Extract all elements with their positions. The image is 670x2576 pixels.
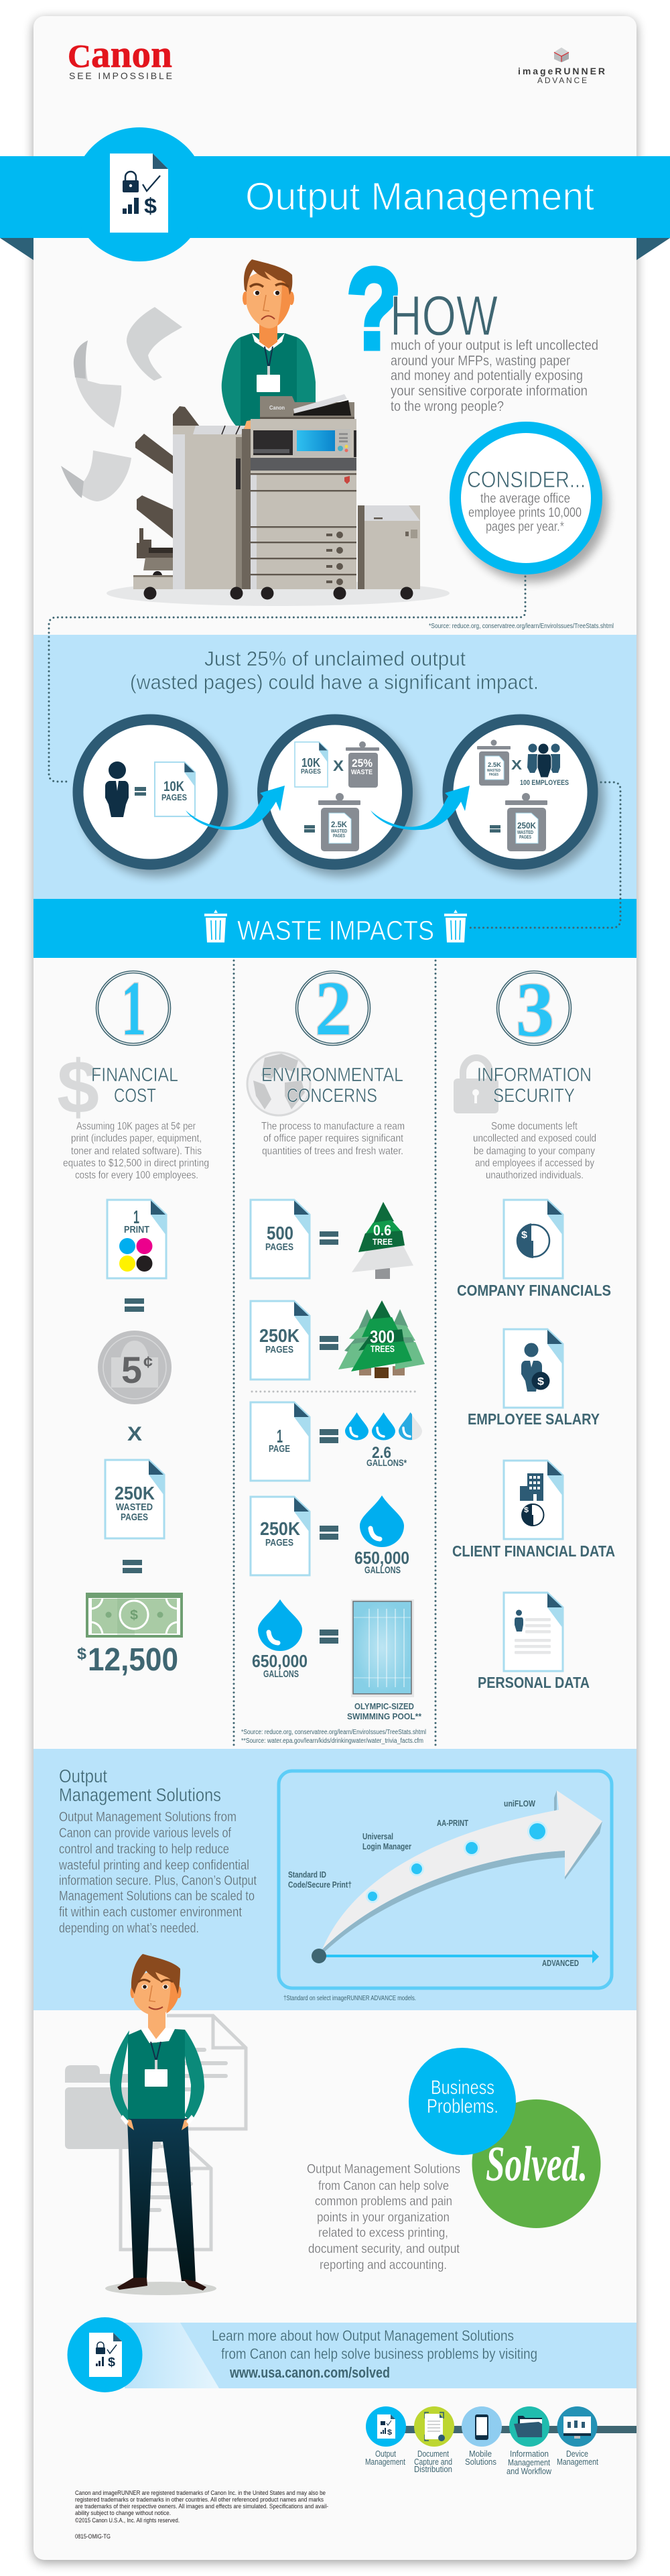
- head: [259, 315, 277, 349]
- heading: SECURITY: [493, 1085, 575, 1107]
- document: 250K wasted pages: 250K: [115, 1483, 155, 1504]
- circles: business problems solved: [409, 2048, 600, 2228]
- pool caption: SWIMMING POOL**: [347, 1711, 422, 1721]
- icon: trash left: [204, 910, 227, 942]
- icon: employees group: [527, 744, 560, 778]
- value: 2.6 gallons: 2.6: [372, 1444, 391, 1462]
- number 2 badge: 2: [315, 966, 352, 1052]
- circle: 100 employees: 2.5K: [488, 761, 502, 768]
- circle: wasted pages: PAGES: [301, 768, 321, 776]
- wheels: [143, 587, 413, 599]
- value: 650,000 gallons pool: 650,000: [252, 1651, 308, 1671]
- icon: trash right: [444, 910, 467, 942]
- circle: wasted pages: [257, 715, 419, 877]
- icon labels: Output: [375, 2449, 396, 2459]
- solutions text block: [58, 1810, 257, 1936]
- icon labels: Device: [566, 2449, 588, 2459]
- body text: [261, 1121, 405, 1157]
- how text block: to the wrong people?: [391, 399, 504, 414]
- body text: [473, 1121, 596, 1181]
- icon: output management: [366, 2406, 406, 2447]
- document: 250K pages water: 250K: [260, 1518, 300, 1539]
- solved text block: points in your organization: [317, 2211, 450, 2225]
- sources: **Source: water.epa.gov/learn/kids/drinkingwater/water_trivia_facts.cfm: [241, 1737, 423, 1745]
- document: 250K wasted pages: PAGES: [121, 1512, 148, 1523]
- body text: [63, 1121, 209, 1181]
- arrow: second step: [371, 786, 470, 830]
- chart labels: Login Manager: [362, 1841, 411, 1851]
- body text: costs for every 100 employees.: [75, 1170, 198, 1181]
- circle: wasted pages: WASTED: [331, 829, 347, 834]
- background documents and folder: [65, 2016, 246, 2250]
- how text block: much of your output is left uncollected: [391, 338, 598, 353]
- legal text: 0815-OMIG-TG: [75, 2533, 111, 2540]
- circles: business problems solved: Solved.: [486, 2137, 588, 2192]
- label: CLIENT FINANCIAL DATA: [452, 1542, 615, 1560]
- icon labels: Management: [557, 2457, 598, 2467]
- solved text block: document security, and output: [308, 2242, 460, 2256]
- circles: business problems solved: Problems.: [427, 2095, 498, 2118]
- consider callout: the average office: [480, 491, 570, 506]
- document: company financials: $: [521, 1229, 528, 1241]
- chart labels: uniFLOW: [504, 1798, 536, 1808]
- chart labels: Universal: [362, 1831, 393, 1841]
- icon labels: Mobile: [469, 2449, 492, 2459]
- man standing: [105, 1954, 216, 2295]
- label: COMPANY FINANCIALS: [457, 1282, 611, 1299]
- connector dotted line: [49, 576, 525, 782]
- document: employee salary: $: [537, 1376, 544, 1388]
- value: 650,000 gallons pool: [252, 1651, 308, 1680]
- column 3: information security: [452, 967, 615, 1691]
- heading: COST: [114, 1085, 156, 1107]
- document: 1 page: PAGE: [269, 1443, 290, 1455]
- pool caption: OLYMPIC-SIZED: [354, 1701, 414, 1711]
- solved text block: [307, 2162, 460, 2272]
- body text: be damaging to your company: [474, 1146, 595, 1157]
- water drops: 2.6 gallons: [345, 1412, 422, 1440]
- circle: wasted pages: PAGES: [333, 834, 345, 839]
- imageRUNNER ADVANCE logo: imageRUNNER: [518, 66, 605, 76]
- heading: FINANCIAL: [91, 1064, 178, 1086]
- document: 500 pages: PAGES: [265, 1241, 293, 1253]
- lanyard and badge: [265, 347, 273, 369]
- circle: 100 employees: WASTED: [517, 831, 533, 835]
- heading: CONCERNS: [287, 1085, 377, 1107]
- tree: 0.6 tree: [352, 1202, 413, 1279]
- circle: wasted pages: 10K: [302, 756, 320, 770]
- solutions bar: [402, 2426, 636, 2433]
- sweater and arms: [222, 337, 249, 426]
- pool caption: [347, 1701, 422, 1721]
- icon: dollar watermark: $: [57, 1045, 99, 1129]
- sources: [241, 1729, 426, 1745]
- equals: [320, 1630, 338, 1644]
- icon: bin 25 percent: [346, 741, 379, 788]
- equals: [320, 1526, 338, 1540]
- impact heading: Just 25% of unclaimed output: [204, 647, 466, 670]
- Canon logo: SEE IMPOSSIBLE: [69, 70, 172, 81]
- title: Output Management: [245, 175, 594, 219]
- icon: globe watermark: [247, 1052, 310, 1115]
- trees: 300 trees: TREES: [371, 1343, 395, 1354]
- how text block: [391, 338, 598, 414]
- column 2: environmental concerns: [241, 966, 426, 1745]
- label: EMPLOYEE SALARY: [468, 1410, 600, 1428]
- icon labels: [365, 2449, 598, 2476]
- neck: [148, 2004, 165, 2043]
- heading: ENVIRONMENTAL: [261, 1064, 403, 1086]
- solutions text block: wasteful printing and keep confidential: [58, 1858, 249, 1873]
- value: 650,000 gallons: 650,000: [354, 1548, 409, 1568]
- big water drop: [360, 1495, 404, 1547]
- document: 1 page: 1: [277, 1426, 283, 1447]
- consider callout: pages per year.*: [486, 519, 564, 534]
- finisher: [173, 406, 200, 434]
- ribbon banner: [0, 127, 670, 261]
- heading: [261, 1064, 403, 1107]
- value: 650,000 gallons: GALLONS: [364, 1565, 401, 1576]
- circle: wasted pages: X: [333, 757, 344, 774]
- amount: 12,500: [88, 1642, 178, 1678]
- value: 2.6 gallons: GALLONS*: [366, 1457, 407, 1468]
- solutions text block: depending on what’s needed.: [59, 1921, 199, 1936]
- equals: [320, 1231, 338, 1245]
- body text: and employees if accessed by: [475, 1158, 594, 1169]
- document: employee salary: [504, 1329, 563, 1408]
- solutions text block: control and tracking to help reduce: [59, 1842, 229, 1857]
- source note: *Source: reduce.org, conservatree.org/learn/EnviroIssues/TreeStats.shtml: [429, 623, 614, 630]
- circle: 100 employees: WASTED: [487, 769, 500, 773]
- solved text block: reporting and accounting.: [320, 2258, 447, 2272]
- icon: lock watermark: [454, 1058, 498, 1113]
- icon: device management: [557, 2406, 598, 2447]
- dollar bill: [86, 1593, 183, 1638]
- icon: output management badge: [67, 2317, 142, 2392]
- legal text: ability subject to change without notice.: [75, 2510, 171, 2517]
- man with printer: [107, 259, 450, 606]
- circles: business problems solved: Business: [431, 2077, 494, 2099]
- question mark: ?: [346, 245, 401, 373]
- value: 2.6 gallons: [366, 1444, 407, 1468]
- multiply sign: X: [127, 1423, 142, 1445]
- document: 1 print: PRINT: [124, 1224, 149, 1235]
- call to action text: from Canon can help solve business problems by visiting: [221, 2345, 537, 2362]
- legal text: ©2015 Canon U.S.A., Inc. All rights reserved.: [75, 2517, 180, 2524]
- man with printer: Canon: [269, 405, 285, 411]
- solved text block: Output Management Solutions: [307, 2162, 460, 2176]
- value: 650,000 gallons pool: GALLONS: [263, 1668, 299, 1680]
- heading: [91, 1064, 178, 1107]
- body text: equates to $12,500 in direct printing: [63, 1158, 209, 1169]
- heading: INFORMATION: [477, 1064, 592, 1086]
- legal text: Canon and imageRUNNER are registered trademarks of Canon Inc. in the United States and may also be: [75, 2490, 326, 2497]
- head: [130, 1986, 135, 1998]
- solutions heading: Management Solutions: [59, 1784, 221, 1805]
- solutions heading: [59, 1766, 221, 1805]
- arms: [110, 2030, 131, 2122]
- paper deck: [358, 505, 420, 589]
- body text: The process to manufacture a ream: [261, 1121, 405, 1132]
- milestone dots: [366, 1821, 547, 1903]
- icon labels: Distribution: [414, 2464, 452, 2474]
- band: 25 percent impact: [34, 635, 636, 899]
- legs: [127, 2118, 196, 2281]
- solved text block: from Canon can help solve: [318, 2179, 449, 2193]
- body text: uncollected and exposed could: [473, 1133, 596, 1144]
- lanyard and badge: [151, 2042, 161, 2061]
- sources: *Source: reduce.org, conservatree.org/learn/EnviroIssues/TreeStats.shtml: [241, 1729, 426, 1736]
- tree: 0.6 tree: 0.6: [373, 1222, 391, 1239]
- coin: 5 cents: [98, 1331, 172, 1404]
- shadow: [105, 2282, 216, 2295]
- label: PERSONAL DATA: [478, 1674, 590, 1691]
- circle: 100 employees: [442, 715, 604, 877]
- icon: output management: $: [387, 2429, 392, 2437]
- document: company financials: [504, 1200, 563, 1278]
- body text: Assuming 10K pages at 5¢ per: [76, 1121, 196, 1132]
- how text block: around your MFPs, wasting paper: [391, 353, 570, 369]
- document: client financial data: [504, 1461, 563, 1539]
- circle: one employee: 10K: [163, 779, 184, 794]
- swimming pool: [351, 1599, 414, 1697]
- number 3 badge: [497, 967, 571, 1053]
- icon: person: [105, 761, 129, 817]
- icon labels: Capture and: [414, 2457, 452, 2467]
- body text: toner and related software). This: [71, 1146, 202, 1157]
- icon: mobile solutions: [462, 2406, 502, 2447]
- shoes: [117, 2278, 206, 2290]
- document: 500 pages: [251, 1200, 310, 1278]
- icon labels: Solutions: [465, 2457, 496, 2467]
- solved text block: common problems and pain: [315, 2195, 452, 2209]
- chart footnote: †Standard on select imageRUNNER ADVANCE models.: [283, 1994, 416, 2002]
- solutions text block: Output Management Solutions from: [59, 1810, 237, 1825]
- second big water drop: [258, 1599, 302, 1651]
- circle: one employee: PAGES: [161, 792, 187, 802]
- call to action text: www.usa.canon.com/solved: [229, 2364, 390, 2381]
- icon labels: and Workflow: [507, 2466, 552, 2476]
- chart labels: Standard ID: [288, 1869, 326, 1880]
- how text block: your sensitive corporate information: [391, 383, 588, 399]
- coin: 5 cents: ¢: [143, 1353, 153, 1371]
- arrow: first step: [186, 786, 285, 830]
- solutions text block: fit within each customer environment: [59, 1905, 242, 1920]
- circle: wasted pages: WASTE: [351, 769, 373, 776]
- document: client financial data: $: [524, 1506, 529, 1514]
- impact heading: [130, 647, 539, 694]
- amount: $: [77, 1645, 87, 1663]
- solved text block: related to excess printing,: [318, 2226, 448, 2240]
- icon: output management document: $: [144, 194, 157, 218]
- icon: output management badge: $: [108, 2355, 115, 2369]
- solutions heading: Output: [59, 1766, 107, 1786]
- call to action band: [67, 2317, 636, 2392]
- circle: 100 employees: 100 EMPLOYEES: [520, 779, 569, 787]
- legal text: registered trademarks or trademarks in other countries. All other referenced product names and marks: [75, 2496, 324, 2504]
- hands: [125, 2118, 191, 2130]
- circle: 100 employees: PAGES: [519, 835, 531, 840]
- circle: wasted pages: 25%: [352, 757, 373, 770]
- number 1 badge: [96, 966, 170, 1052]
- growth arrow: [322, 1790, 602, 1954]
- call to action text: Learn more about how Output Management Solutions: [212, 2327, 514, 2344]
- icon labels: Information: [510, 2449, 549, 2459]
- band: waste impacts heading: WASTE IMPACTS: [237, 915, 434, 946]
- number 1 badge: 1: [121, 966, 146, 1052]
- trees: 300 trees: [338, 1300, 425, 1378]
- legal text: are trademarks of their respective owners. All images and effects are simulated. Specifications and avail-: [75, 2503, 328, 2510]
- solutions text block: information secure. Plus, Canon’s Output: [59, 1874, 257, 1888]
- band: output management solutions: [34, 1749, 636, 2010]
- chart: solutions progression: [279, 1771, 612, 1988]
- document: 250K pages: [251, 1301, 310, 1379]
- Canon logo: Canon: [68, 32, 172, 76]
- column 1: financial cost: [57, 966, 209, 1678]
- icon labels: Document: [417, 2449, 449, 2459]
- icon: output management document: [110, 154, 168, 233]
- circle: one employee: [72, 715, 234, 877]
- document: 250K pages water: PAGES: [265, 1537, 293, 1548]
- number 2 badge: [296, 966, 370, 1052]
- band: waste impacts heading: [34, 899, 636, 958]
- chart labels: AA-PRINT: [437, 1818, 468, 1828]
- equals: [320, 1429, 338, 1443]
- main unit: [242, 429, 251, 589]
- document: 1 print: [107, 1200, 166, 1278]
- document: 500 pages: 500: [267, 1223, 293, 1243]
- consider callout: employee prints 10,000: [468, 505, 582, 520]
- document: 250K wasted pages: WASTED: [116, 1501, 153, 1513]
- consider callout: CONSIDER...: [467, 467, 586, 493]
- equals: [125, 1298, 144, 1312]
- axis: [312, 1949, 599, 1963]
- circle: 100 employees: X: [511, 758, 523, 773]
- body text: print (includes paper, equipment,: [71, 1133, 202, 1144]
- number 3 badge: 3: [516, 967, 554, 1053]
- connector to waste impacts: [469, 782, 620, 928]
- call to action text: [212, 2327, 537, 2381]
- chart labels: [288, 1798, 579, 1968]
- icon: bin 2.5K: [318, 793, 360, 851]
- document: 250K wasted pages: [105, 1460, 164, 1538]
- document: 250K pages water: [251, 1497, 310, 1575]
- legal text: [75, 2490, 328, 2540]
- imageRUNNER ADVANCE logo: ADVANCE: [537, 76, 587, 85]
- flying paper sheets: [61, 307, 182, 501]
- document: 1 page: [251, 1402, 310, 1481]
- document: personal data: [504, 1593, 563, 1671]
- circle: 100 employees: 250K: [517, 820, 537, 831]
- icon: bin 250K: [505, 793, 547, 851]
- icon labels: Management: [508, 2457, 550, 2467]
- imageRUNNER ADVANCE logo: [518, 48, 605, 85]
- icon: information management: [509, 2406, 549, 2447]
- document: 250K pages: 250K: [259, 1325, 299, 1346]
- torso: [128, 2029, 185, 2119]
- body text: Some documents left: [491, 1121, 578, 1132]
- circle: wasted pages: 2.5K: [331, 820, 347, 829]
- chart labels: Code/Secure Print†: [288, 1880, 352, 1890]
- body text: unauthorized individuals.: [486, 1170, 584, 1181]
- heading: [477, 1064, 592, 1107]
- shadow: [107, 580, 450, 606]
- dollar bill: $: [130, 1608, 138, 1623]
- heading: HOW: HOW: [390, 284, 498, 347]
- solutions text block: Management Solutions can be scaled to: [59, 1889, 255, 1904]
- impact heading: (wasted pages) could have a significant impact.: [130, 670, 539, 694]
- document: 250K pages: PAGES: [265, 1344, 293, 1355]
- icon labels: Management: [365, 2457, 405, 2467]
- coin: 5 cents: 5: [121, 1349, 142, 1391]
- trees: 300 trees: 300: [370, 1327, 395, 1347]
- circle: 100 employees: PAGES: [489, 773, 499, 777]
- document: 1 print: 1: [133, 1207, 139, 1227]
- solutions text block: Canon can provide various levels of: [59, 1826, 231, 1841]
- body text: of office paper requires significant: [263, 1133, 403, 1144]
- value: 650,000 gallons: [354, 1548, 409, 1576]
- consider callout: [450, 422, 608, 582]
- body text: quantities of trees and fresh water.: [262, 1146, 403, 1157]
- equals: [320, 1336, 338, 1350]
- how text block: and money and potentially exposing: [391, 368, 583, 383]
- tree: 0.6 tree: TREE: [373, 1237, 393, 1247]
- chart labels: ADVANCED: [542, 1958, 579, 1968]
- equals: [123, 1560, 142, 1573]
- icon: document capture: [414, 2406, 454, 2447]
